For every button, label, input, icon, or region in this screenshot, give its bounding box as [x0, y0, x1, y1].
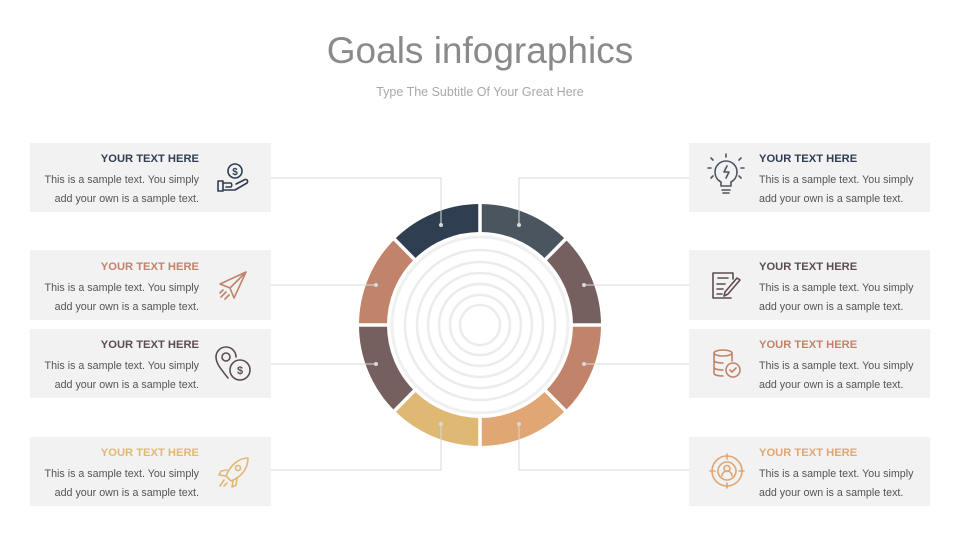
panel: right 3 — [689, 329, 930, 398]
icon: location dollar: $ — [237, 365, 243, 377]
panel: left 2: add your own is a sample text. — [55, 301, 199, 313]
panel: left 3: This is a sample text. You simply — [45, 360, 200, 372]
subtitle: Type The Subtitle Of Your Great Here — [376, 85, 584, 99]
panel: right 4: This is a sample text. You simply — [759, 468, 914, 480]
icon: location dollar — [216, 347, 250, 380]
icon: money hand: $ — [232, 167, 238, 178]
panel: right 4 — [689, 437, 930, 506]
panel: right 2: This is a sample text. You simply — [759, 282, 914, 294]
panel: left 3: add your own is a sample text. — [55, 379, 199, 391]
icon: lightbulb — [708, 154, 744, 193]
panel: right 3: add your own is a sample text. — [759, 379, 903, 391]
icon: paper plane — [220, 272, 246, 299]
panel: right 4: add your own is a sample text. — [759, 487, 903, 499]
panel: left 4 — [30, 437, 271, 506]
ring chart — [355, 200, 605, 450]
panel: left 1 — [30, 143, 271, 212]
icon: database check — [714, 350, 740, 377]
icon: rocket — [219, 458, 248, 487]
panel: right 1: add your own is a sample text. — [759, 193, 903, 205]
panel: right 2: add your own is a sample text. — [759, 301, 903, 313]
panel: left 3: YOUR TEXT HERE — [101, 339, 200, 351]
panel: left 1: This is a sample text. You simply — [45, 174, 200, 186]
panel: left 4: This is a sample text. You simply — [45, 468, 200, 480]
panel: left 1: YOUR TEXT HERE — [101, 153, 200, 165]
panel: left 1: add your own is a sample text. — [55, 193, 199, 205]
panel: right 1: This is a sample text. You simply — [759, 174, 914, 186]
icon: document edit — [713, 273, 740, 298]
panel: right 1 — [689, 143, 930, 212]
panel: right 2 — [689, 250, 930, 320]
panel: right 3: This is a sample text. You simply — [759, 360, 914, 372]
panel: left 4: add your own is a sample text. — [55, 487, 199, 499]
panel: left 4: YOUR TEXT HERE — [101, 447, 200, 459]
icon: money hand — [218, 164, 248, 191]
panel: right 1: YOUR TEXT HERE — [759, 153, 858, 165]
panel: right 4: YOUR TEXT HERE — [759, 447, 858, 459]
panel: left 2: This is a sample text. You simply — [45, 282, 200, 294]
connector lines — [271, 178, 689, 470]
title: Goals infographics — [327, 30, 633, 71]
panel: right 2: YOUR TEXT HERE — [759, 261, 858, 273]
panel: right 3: YOUR TEXT HERE — [759, 339, 858, 351]
icon: target person — [710, 454, 744, 488]
panel: left 2: YOUR TEXT HERE — [101, 261, 200, 273]
panel: left 2 — [30, 250, 271, 320]
panel: left 3 — [30, 329, 271, 398]
